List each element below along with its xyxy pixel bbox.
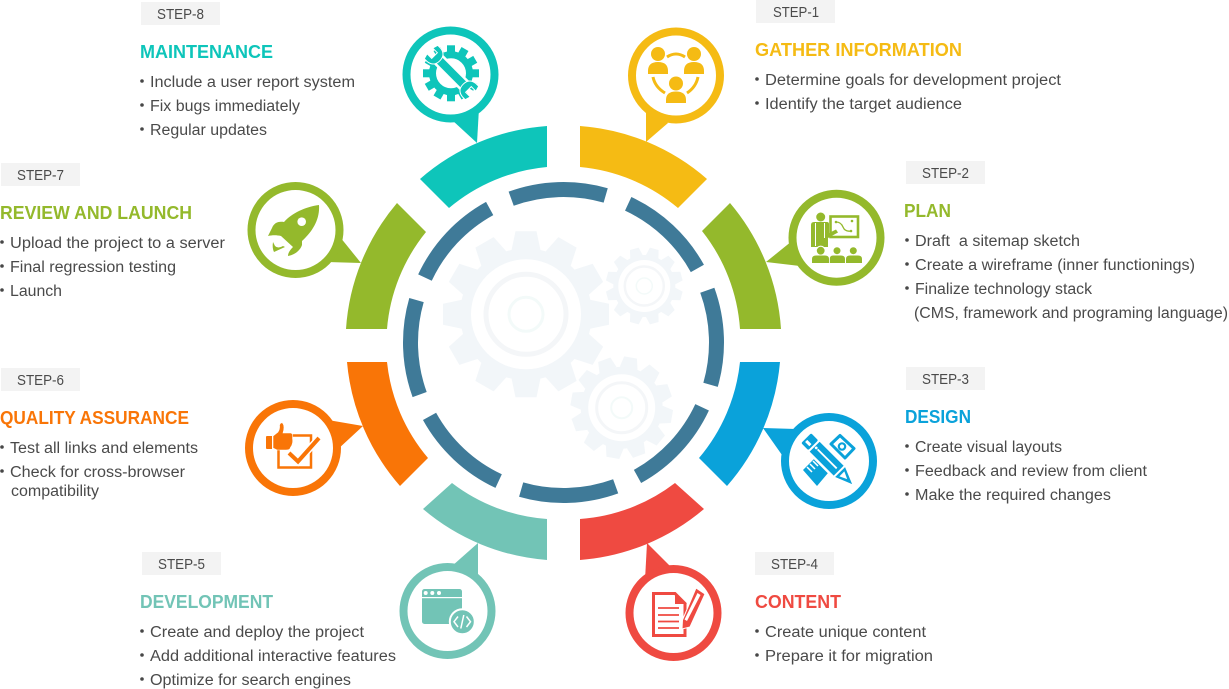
- heading: GATHER INFORMATION: [755, 40, 962, 60]
- arc segment: step 2: [702, 203, 781, 329]
- step badge: STEP-3: [922, 372, 969, 388]
- pin: step 5: [404, 543, 492, 655]
- step badge: [142, 552, 221, 575]
- icon: document and pencil: [654, 588, 705, 636]
- icon: thumbs up and checkbox: [266, 423, 319, 468]
- bullet list: Finalize technology stack: [915, 281, 1092, 298]
- pin: step 6: [249, 404, 363, 492]
- icon: rocket: [268, 205, 319, 256]
- step 8: maintenance: [140, 2, 547, 208]
- bullet list: Prepare it for migration: [765, 648, 933, 665]
- heading: QUALITY ASSURANCE: [0, 408, 189, 428]
- bullet list: Create visual layouts: [915, 439, 1062, 456]
- bullet list: (CMS, framework and programing language): [914, 305, 1228, 322]
- icon: team of people: [648, 47, 704, 103]
- step 4: content: [580, 483, 933, 665]
- pin: step 7: [252, 186, 361, 274]
- bullet list: [140, 74, 355, 139]
- step badge: [906, 161, 985, 184]
- arc segment: step 4: [580, 483, 704, 560]
- step badge: STEP-8: [157, 7, 204, 23]
- bullet list: Create a wireframe (inner functionings): [915, 257, 1195, 274]
- step 1: gather information: [580, 0, 1062, 208]
- step badge: STEP-5: [158, 557, 205, 573]
- arc segment: step 3: [699, 362, 780, 486]
- bullet list: Identify the target audience: [765, 96, 962, 113]
- step badge: [756, 0, 835, 23]
- icon: gear and wrench: [423, 44, 480, 101]
- bullet list: Fix bugs immediately: [150, 98, 300, 115]
- small gear: [605, 247, 683, 325]
- bullet list: Draft a sitemap sketch: [915, 233, 1080, 250]
- step 5: development: [140, 483, 547, 689]
- bullet list: Test all links and elements: [10, 440, 198, 457]
- large gear: [443, 231, 609, 397]
- bullet list: [905, 439, 1148, 504]
- bullet list: Include a user report system: [150, 74, 355, 91]
- arc segment: step 5: [423, 483, 547, 560]
- arc segment: step 1: [580, 126, 707, 208]
- step 7: review and launch: [0, 163, 426, 329]
- bullet list: Determine goals for development project: [765, 72, 1062, 89]
- step badge: STEP-4: [771, 557, 818, 573]
- step badge: [141, 2, 220, 25]
- bullet list: Add additional interactive features: [150, 648, 396, 665]
- pin: step 3: [763, 417, 873, 505]
- step badge: STEP-6: [17, 373, 64, 389]
- bullet list: Create unique content: [765, 624, 927, 641]
- bullet list: Final regression testing: [10, 259, 176, 276]
- bullet list: Feedback and review from client: [915, 463, 1148, 480]
- bullet list: Regular updates: [150, 122, 267, 139]
- heading: MAINTENANCE: [140, 42, 273, 62]
- bullet list: Launch: [10, 283, 62, 300]
- step 2: plan: [702, 161, 1228, 329]
- pin: step 8: [406, 30, 494, 143]
- background gears: [443, 231, 683, 459]
- heading: DESIGN: [905, 407, 971, 427]
- step badge: [755, 552, 834, 575]
- arc segment: step 7: [346, 203, 426, 329]
- bullet list: Make the required changes: [915, 487, 1111, 504]
- bullet list: Create and deploy the project: [150, 624, 365, 641]
- arc segment: step 6: [347, 362, 428, 486]
- pin: step 1: [632, 32, 720, 142]
- heading: REVIEW AND LAUNCH: [0, 203, 192, 223]
- bullet list: [755, 624, 933, 665]
- pin: step 4: [630, 543, 718, 657]
- step badge: STEP-2: [922, 166, 969, 182]
- step badge: [906, 367, 985, 390]
- bullet list: compatibility: [11, 483, 99, 500]
- heading: PLAN: [904, 201, 951, 221]
- bullet list: [0, 235, 225, 300]
- bullet list: [0, 440, 198, 500]
- step badge: STEP-1: [773, 5, 819, 21]
- bullet list: Upload the project to a server: [10, 235, 225, 252]
- icon: browser window with code: [422, 589, 475, 634]
- bullet list: Optimize for search engines: [150, 672, 351, 689]
- arc segment: step 8: [420, 126, 547, 208]
- step 3: design: [699, 362, 1148, 505]
- step badge: STEP-7: [17, 168, 64, 184]
- heading: DEVELOPMENT: [140, 592, 273, 612]
- step badge: [1, 368, 80, 391]
- icon: presenter with audience: [811, 212, 862, 263]
- bullet list: [905, 233, 1228, 322]
- heading: CONTENT: [755, 592, 841, 612]
- bullet list: Check for cross-browser: [10, 464, 185, 481]
- step 6: quality assurance: [0, 362, 428, 500]
- bullet list: [755, 72, 1062, 113]
- bullet list: [140, 624, 396, 689]
- step badge: [1, 163, 80, 186]
- medium gear: [570, 356, 673, 459]
- pin: step 2: [766, 194, 880, 282]
- icon: pencil, ruler and photo: [799, 431, 859, 491]
- dashed inner ring: [367, 146, 760, 539]
